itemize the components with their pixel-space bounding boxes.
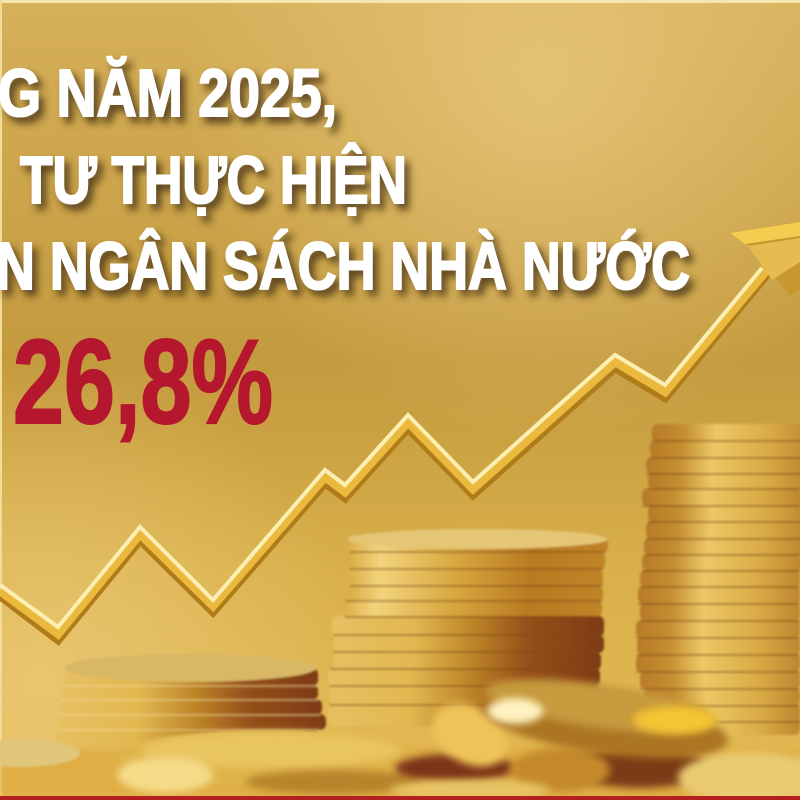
percentage figure: 26,8% (13, 315, 273, 449)
title line 2: TƯ THỰC HIỆN (20, 143, 407, 218)
title (0, 56, 690, 304)
rising gold arrow line (0, 268, 768, 639)
coin stack: middle (328, 529, 608, 726)
coin stack: small left (56, 654, 326, 746)
arrow head (730, 222, 800, 296)
bottom red strip (0, 796, 800, 800)
title line 1: G NĂM 2025, (0, 56, 337, 131)
foreground loose coins (0, 668, 800, 800)
coin stack: right (636, 424, 800, 735)
